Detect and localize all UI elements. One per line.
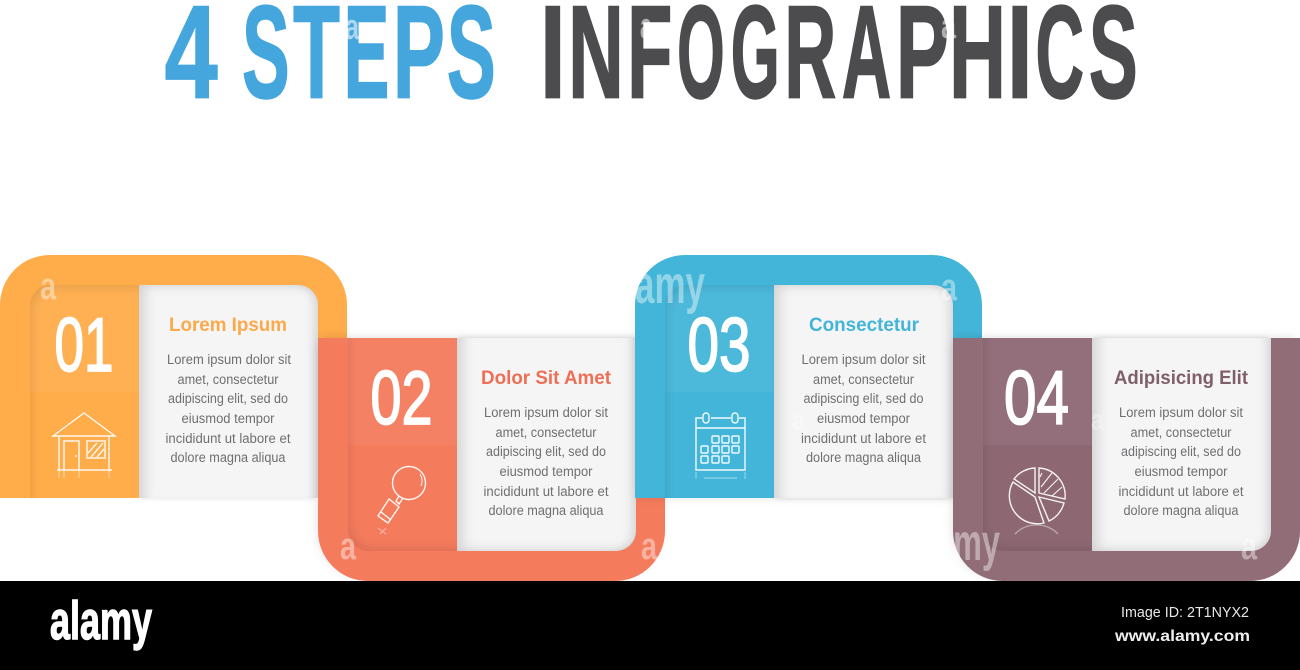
step 1 colour column bbox=[30, 285, 139, 498]
step 3 text panel bbox=[774, 285, 953, 498]
step 1 content bbox=[40, 266, 291, 478]
title watermarks bbox=[345, 5, 957, 47]
body text: incididunt ut labore et bbox=[166, 431, 291, 446]
panel: step 1 bbox=[0, 255, 347, 500]
watermark: a bbox=[340, 526, 357, 568]
watermark bbox=[340, 526, 658, 568]
watermark bbox=[953, 404, 1258, 572]
step 2 frame bbox=[318, 338, 665, 581]
step 4 frame bbox=[953, 338, 1300, 581]
heading: Adipisicing Elit bbox=[1114, 368, 1249, 389]
number 01: 01 bbox=[54, 303, 114, 388]
watermark bbox=[635, 255, 958, 437]
body text: Lorem ipsum dolor sit bbox=[1119, 405, 1243, 420]
step 2 content bbox=[340, 356, 658, 568]
body text: dolore magna aliqua bbox=[170, 450, 286, 465]
number 02: 02 bbox=[370, 356, 432, 441]
watermark: a bbox=[1241, 526, 1258, 568]
image id: Image ID: 2T1NYX2 bbox=[1121, 605, 1249, 621]
step 2 colour column bbox=[348, 338, 457, 551]
title watermarks: a bbox=[941, 5, 957, 46]
icon: calendar bbox=[696, 413, 745, 479]
body text: amet, consectetur bbox=[813, 372, 914, 387]
step 2 text panel bbox=[457, 338, 636, 551]
body text: incididunt ut labore et bbox=[1118, 484, 1244, 499]
footer bar bbox=[0, 581, 1300, 670]
body text bbox=[801, 352, 926, 465]
body text: adipiscing elit, sed do bbox=[168, 391, 288, 406]
body text: adipiscing elit, sed do bbox=[1121, 444, 1241, 459]
icon: house bbox=[53, 413, 115, 478]
body text: Lorem ipsum dolor sit bbox=[802, 352, 926, 367]
body text: dolore magna aliqua bbox=[488, 503, 604, 518]
body text: Lorem ipsum dolor sit bbox=[167, 352, 291, 367]
watermark: amy bbox=[635, 255, 705, 315]
body text: amet, consectetur bbox=[1130, 425, 1232, 440]
step 1 text panel bbox=[139, 285, 318, 498]
website: www.alamy.com bbox=[1114, 628, 1250, 645]
logo: alamy: alamy bbox=[50, 591, 152, 651]
body text: amet, consectetur bbox=[496, 425, 597, 440]
body text: Lorem ipsum dolor sit bbox=[484, 405, 608, 420]
body text: eiusmod tempor bbox=[500, 464, 593, 479]
footer text and logo bbox=[50, 591, 1250, 651]
number 03: 03 bbox=[688, 303, 750, 388]
icon: magnifying glass bbox=[378, 466, 426, 534]
body text: incididunt ut labore et bbox=[484, 484, 609, 499]
body text: eiusmod tempor bbox=[817, 411, 910, 426]
step 1 frame bbox=[0, 255, 347, 498]
step 3 colour column bbox=[665, 285, 774, 498]
body text: incididunt ut labore et bbox=[801, 431, 926, 446]
step 3 frame bbox=[635, 255, 982, 498]
watermark: my bbox=[953, 514, 1000, 572]
watermark: a bbox=[792, 404, 805, 437]
title bbox=[165, 0, 1138, 104]
step 4 content bbox=[953, 356, 1258, 572]
watermark: a bbox=[641, 526, 658, 568]
panel: step 3 bbox=[635, 255, 982, 498]
heading: Consectetur bbox=[809, 315, 920, 336]
step 4 colour column bbox=[983, 338, 1092, 551]
body text: dolore magna aliqua bbox=[806, 450, 921, 465]
body text: amet, consectetur bbox=[178, 372, 279, 387]
heading: Lorem Ipsum bbox=[169, 315, 287, 336]
watermark: a bbox=[40, 266, 57, 308]
body text: eiusmod tempor bbox=[182, 411, 275, 426]
panel: step 2 bbox=[318, 338, 665, 581]
title watermarks: a bbox=[345, 6, 360, 47]
body text bbox=[166, 352, 291, 465]
icon: pie chart bbox=[1009, 468, 1065, 534]
body text: adipiscing elit, sed do bbox=[804, 391, 924, 406]
number 04: 04 bbox=[1004, 356, 1069, 441]
body text: adipiscing elit, sed do bbox=[486, 444, 606, 459]
body text: eiusmod tempor bbox=[1134, 464, 1228, 479]
panel: step 4 bbox=[953, 338, 1300, 581]
watermark: a bbox=[1091, 404, 1104, 437]
body text bbox=[484, 405, 609, 518]
heading: Dolor Sit Amet bbox=[481, 368, 612, 389]
watermark: a bbox=[941, 267, 958, 309]
step 3 content bbox=[635, 255, 958, 479]
body text bbox=[1118, 405, 1244, 518]
step 4 text panel bbox=[1092, 338, 1271, 551]
title watermarks: a bbox=[640, 5, 653, 46]
body text: dolore magna aliqua bbox=[1124, 503, 1239, 518]
